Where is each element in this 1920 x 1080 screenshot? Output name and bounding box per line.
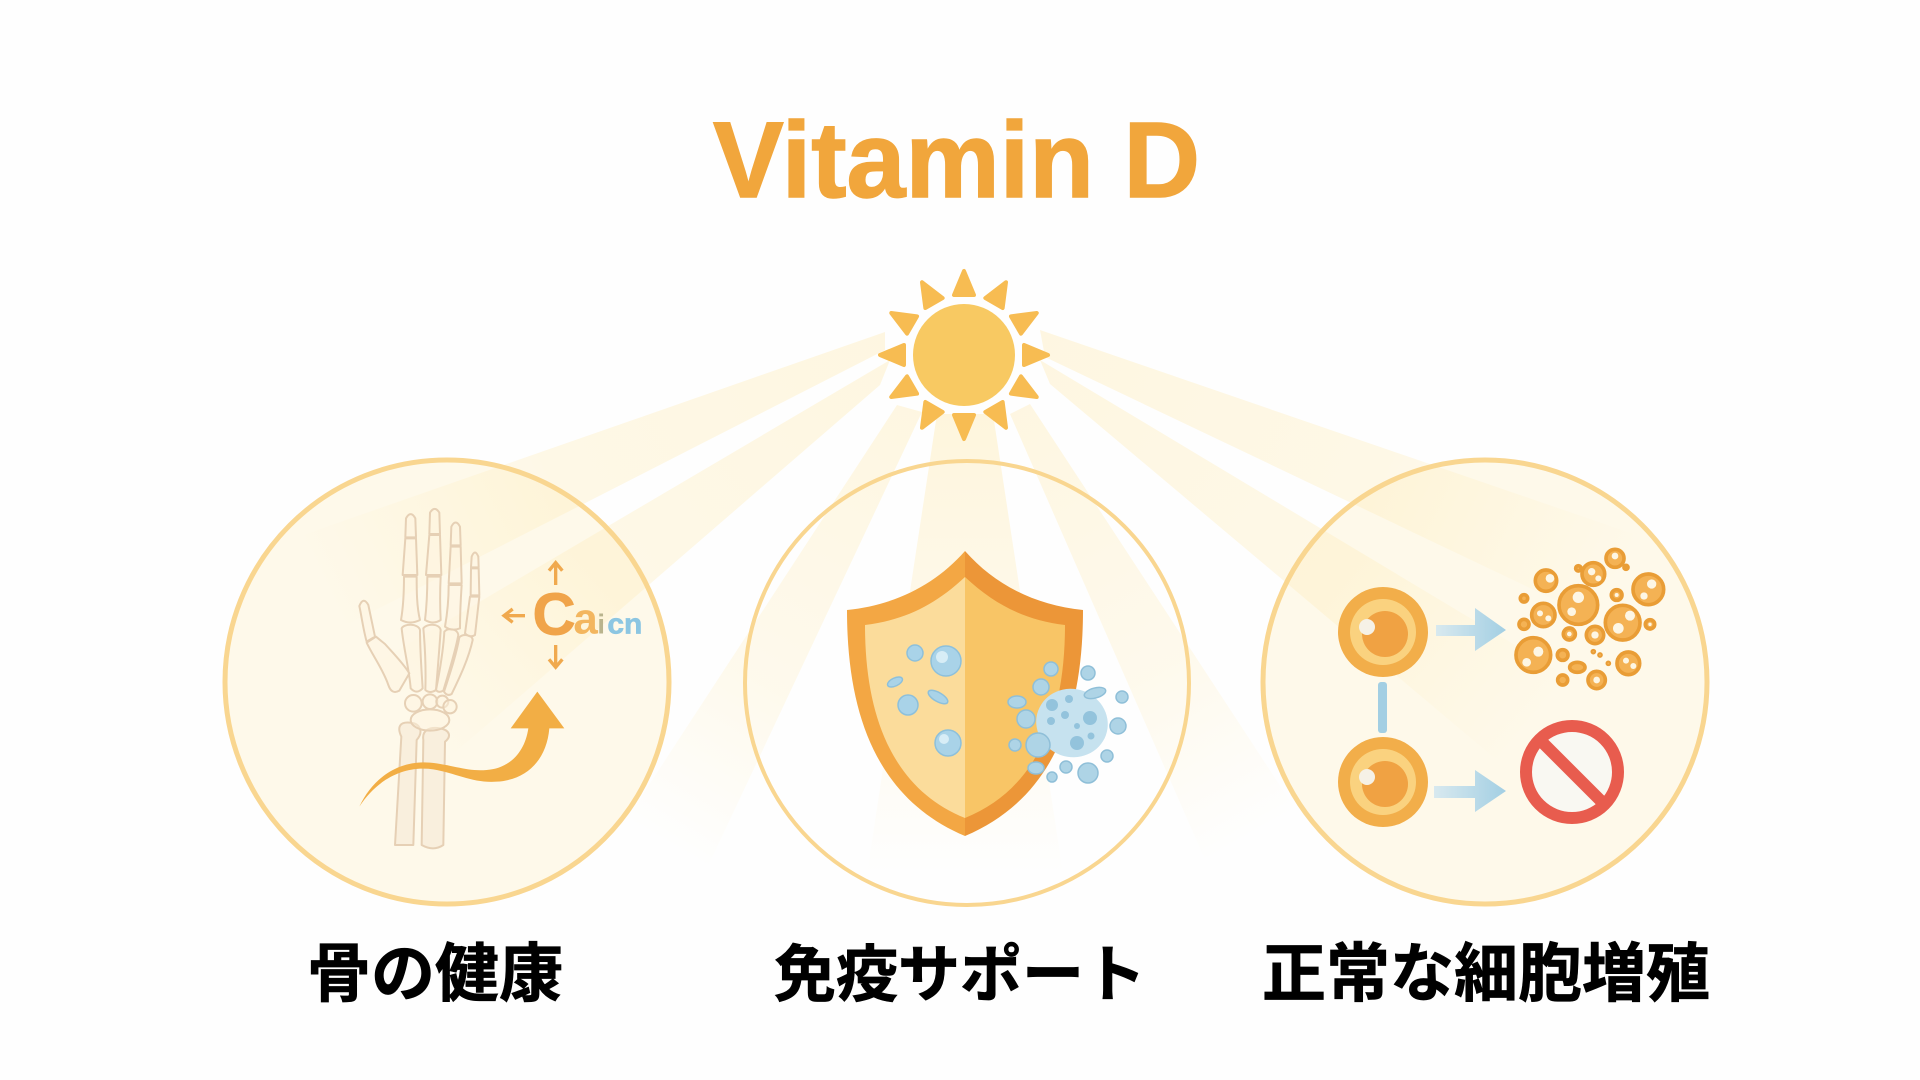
icon: sun	[880, 271, 1048, 439]
label: calcium	[533, 580, 642, 647]
icon: hand skeleton	[359, 509, 479, 848]
icon: immune cells	[886, 645, 961, 756]
icon: calcium arrows	[504, 563, 562, 667]
label: calcium: C	[533, 580, 576, 647]
icon: multiplying cells	[1516, 549, 1664, 689]
icon: virus	[1008, 662, 1128, 783]
connector	[1378, 682, 1387, 733]
label: calcium: i	[597, 608, 605, 639]
panel: normal cell proliferation	[1263, 460, 1707, 904]
icon: prohibited sign	[1526, 726, 1618, 818]
icon: lower cell	[1338, 737, 1428, 827]
arrow: to proliferation	[1436, 608, 1506, 651]
title: Vitamin D	[713, 99, 1200, 220]
label: bone health: 骨の健康	[307, 938, 563, 1010]
label: calcium: cn	[607, 608, 642, 640]
icon: upper cell	[1338, 587, 1428, 677]
circle fill: cell panel	[1263, 460, 1707, 904]
icon: shield	[847, 551, 1083, 836]
circle fill: bone panel	[225, 460, 669, 904]
label: normal cell proliferation: 正常な細胞増殖	[1262, 938, 1710, 1010]
arrow: absorption curve	[359, 692, 564, 807]
light beams radiating from sun	[260, 330, 1680, 900]
panel: immune support	[745, 461, 1189, 905]
panel: bone health	[225, 460, 669, 904]
arrow: to stop	[1434, 770, 1506, 812]
label: immune support: 免疫サポート	[774, 941, 1146, 1010]
label: calcium: a	[573, 594, 598, 643]
